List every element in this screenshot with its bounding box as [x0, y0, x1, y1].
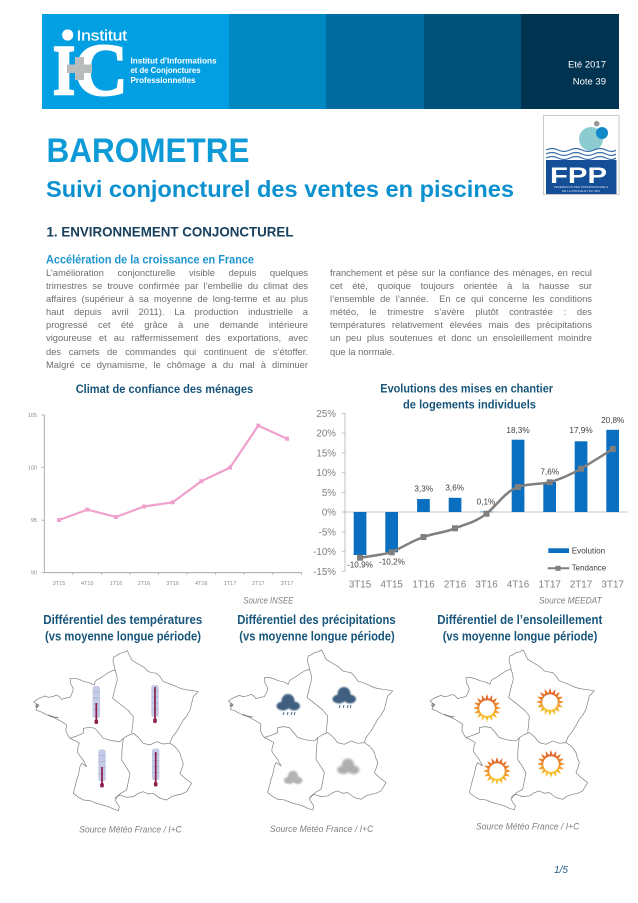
text block: left column: trimestres se trouve confirmée par l’embellie du climat des [46, 280, 308, 291]
logo: Institut I+C: Institut d'Informations [130, 56, 217, 66]
logo: FPP [544, 116, 619, 194]
text block: right column: franchement et pèse sur la confiance des ménages, en recul [330, 267, 592, 278]
line chart: climat de confiance des ménages: 4T15 [81, 581, 94, 587]
bar chart: mises en chantier: -5% [319, 527, 336, 538]
legend: Evolution [572, 546, 605, 556]
bar chart: mises en chantier: -10% [313, 547, 336, 558]
section heading: 1. ENVIRONNEMENT CONJONCTUREL [46, 224, 294, 240]
data labels: -10,9% [347, 560, 373, 569]
data labels: 20,8% [601, 416, 624, 425]
logo: FPP: FPP [550, 163, 607, 188]
heading [43, 613, 202, 644]
text block: right column: l’ensemble de l’année. En ce qui concerne les conditions [330, 293, 592, 304]
text block: right column: que la normale. [330, 346, 395, 357]
logo: Institut I+C: C [74, 30, 128, 112]
line chart: climat de confiance des ménages: 3T15 [53, 581, 65, 587]
bar chart: mises en chantier: 20% [316, 429, 336, 440]
issue date and note number: Eté 2017 [568, 60, 606, 71]
data labels: 0,1% [477, 497, 495, 506]
legend [548, 546, 606, 573]
chart title [380, 382, 553, 411]
line chart: climat de confiance des ménages: 2T16 [138, 581, 150, 587]
issue date and note number: Note 39 [573, 77, 606, 88]
bar chart: mises en chantier: 3T15 [349, 580, 372, 590]
source: Source INSEE [243, 595, 294, 605]
line chart: climat de confiance des ménages: 3T17 [281, 581, 293, 587]
bar chart: mises en chantier: 10% [316, 468, 336, 479]
bar chart: mises en chantier: -15% [313, 567, 336, 578]
bar chart: mises en chantier: 1T17 [539, 580, 561, 590]
text block: left column: progressé cet été grâce à une demande intérieure [46, 319, 308, 330]
text block: right column: météo, le trimestre s’avère plutôt contrastée : des [330, 306, 592, 317]
bar chart: mises en chantier: 2T16 [444, 580, 467, 590]
heading: Différentiel des précipitations [237, 613, 396, 627]
text block: left column: des carnets de commandes qui continuent de s’étoffer. [46, 346, 308, 357]
bar chart: mises en chantier: 25% [316, 409, 336, 420]
panel: temperatures map [34, 613, 202, 835]
icon: suns [473, 688, 565, 785]
logo: FPP: FEDERATION DES PROFESSIONNELS [554, 185, 608, 189]
heading: Différentiel de l’ensoleillement [437, 613, 603, 627]
chart title: Climat de confiance des ménages [76, 382, 253, 396]
data labels [347, 416, 624, 569]
title: BAROMETRE [46, 132, 250, 170]
data labels: -10,2% [379, 558, 405, 567]
text block: left column: vigoureuse et au raffermissement des exportations, avec [46, 332, 308, 343]
map: France regions [430, 650, 594, 810]
map: France regions [34, 651, 198, 811]
source: Source MEEDAT [539, 595, 603, 605]
text block: right column [330, 267, 592, 357]
text block: right column: cet été, quoique toujours orientée à la hausse sur [330, 280, 592, 291]
legend: Tendance [572, 563, 606, 573]
bar chart: mises en chantier: 0% [322, 508, 336, 519]
bar chart: mises en chantier: 15% [316, 448, 336, 459]
confidence line [59, 426, 287, 520]
text block: left column: affaires (supérieur à sa moyenne de long-terme et au plus [46, 293, 308, 304]
logo: Institut I+C: et de Conjonctures [130, 65, 201, 75]
heading: (vs moyenne longue période) [443, 630, 597, 644]
panel: precipitation map [228, 613, 396, 835]
text block: left column [46, 267, 308, 370]
data labels: 7,6% [540, 468, 559, 477]
bar chart: mises en chantier: 4T15 [381, 580, 403, 590]
logo: Institut I+C [53, 28, 217, 112]
logo: Institut I+C: Professionnelles [130, 75, 196, 85]
source: Source Météo France / I+C [270, 824, 373, 835]
source: Source Météo France / I+C [79, 824, 182, 835]
logo: Institut I+C: I [53, 32, 75, 110]
line chart: climat de confiance des ménages: 100 [28, 466, 37, 472]
line chart: climat de confiance des ménages: 95 [31, 518, 37, 524]
bar chart: mises en chantier [313, 382, 628, 605]
heading: (vs moyenne longue période) [239, 630, 395, 644]
line chart: climat de confiance des ménages [28, 382, 302, 605]
chart title: de logements individuels [403, 397, 536, 411]
chart title: Evolutions des mises en chantier [380, 382, 553, 396]
icon: thermometers [93, 685, 159, 788]
page number: 1/5 [554, 865, 568, 876]
line chart: climat de confiance des ménages: 1T17 [224, 581, 236, 587]
text block: left column: Malgré ce dynamisme, le chômage a du mal à diminuer [46, 359, 308, 370]
subtitle: Suivi conjoncturel des ventes en piscines [46, 176, 514, 202]
line chart: climat de confiance des ménages: 105 [28, 413, 37, 419]
line chart: climat de confiance des ménages: 2T17 [252, 581, 265, 587]
text block: left column: haut depuis avril 2011). La production industrielle a [46, 306, 308, 317]
bars [354, 430, 619, 555]
data labels: 3,3% [414, 485, 433, 494]
line chart: climat de confiance des ménages: 3T16 [166, 581, 179, 587]
logo: Institut I+C: Institut [76, 28, 128, 45]
text block: right column: un peu plus soutenues et donc un ensoleillement moindre [330, 332, 592, 343]
source: Source Météo France / I+C [476, 821, 579, 832]
icon: clouds [276, 687, 359, 784]
bar chart: mises en chantier: 4T16 [507, 580, 530, 590]
bar chart: mises en chantier: 5% [322, 488, 336, 499]
bar chart: mises en chantier: 3T17 [602, 580, 624, 590]
bar chart: mises en chantier: 3T16 [475, 580, 498, 590]
data labels: 3,6% [445, 484, 464, 493]
trend line [360, 449, 613, 558]
data labels: 18,3% [506, 426, 530, 435]
line chart: climat de confiance des ménages: 90 [31, 571, 37, 577]
text block: right column: températures relativement élevées mais des précipitations [330, 319, 592, 330]
issue date and note number [568, 60, 606, 88]
panel: sunshine map [430, 613, 603, 832]
line chart: climat de confiance des ménages: 1T16 [110, 581, 122, 587]
logo: FPP: DE LA PISCINE ET DU SPA [562, 189, 600, 193]
map: France regions [228, 650, 393, 810]
sub-heading: Accélération de la croissance en France [46, 254, 254, 266]
bar chart: mises en chantier: 1T16 [412, 580, 435, 590]
heading: Différentiel des températures [43, 613, 202, 627]
heading [237, 613, 396, 644]
bar chart: mises en chantier: 2T17 [570, 580, 592, 590]
data labels: 17,9% [569, 426, 593, 435]
header banner [42, 14, 619, 112]
text block: left column: L’amélioration conjoncturelle visible depuis quelques [46, 267, 308, 278]
line chart: climat de confiance des ménages: 4T16 [195, 581, 208, 587]
heading: (vs moyenne longue période) [45, 630, 201, 644]
heading [437, 613, 603, 644]
